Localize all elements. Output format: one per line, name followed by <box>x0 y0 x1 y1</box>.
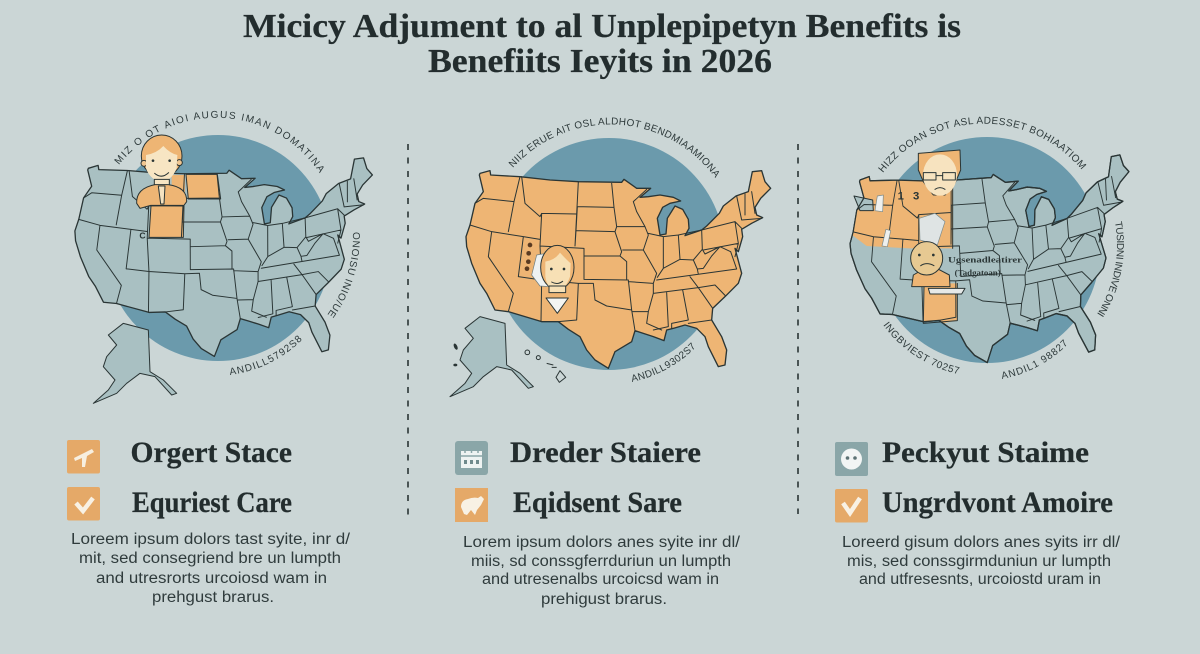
body text: Loreerd gisum dolors anes syits irr dl/ <box>842 534 1121 551</box>
Alaska <box>450 317 533 397</box>
map label: Ugsenadleatirer <box>948 254 1022 264</box>
curved labels: ANDILL5792S8 <box>230 336 302 375</box>
heading: Ungrdvont Amoire <box>882 487 1113 519</box>
body text <box>842 534 1121 588</box>
icon: calendar <box>455 441 488 475</box>
person <box>532 245 574 313</box>
highlighted states <box>852 178 957 323</box>
map of the United States <box>75 135 373 403</box>
body text: and utresenalbs urcoicsd wam in <box>482 571 719 588</box>
body text: Loreem ipsum dolors tast syite, inr d/ <box>71 531 351 548</box>
map circle <box>105 135 331 361</box>
person with white cap <box>911 213 965 294</box>
Alaska <box>93 323 177 403</box>
curved labels: MIZ O OT AIOI AUGUS IMAN DOMATINA <box>114 110 324 174</box>
heading: Equriest Care <box>132 487 292 519</box>
curved labels <box>508 118 719 382</box>
panel: centre map <box>450 118 772 398</box>
curved labels: NIIZ ERUE AIT OSL ALDHOT BENDMIAAMIONA <box>508 118 719 178</box>
body text: mit, sed consegriend bre un lumpth <box>79 550 341 567</box>
column three text <box>835 437 1121 588</box>
map label <box>948 254 1022 278</box>
body text: prehigust brarus. <box>541 591 667 608</box>
body text <box>463 534 741 608</box>
icon: check <box>67 487 100 520</box>
map circle <box>874 137 1100 363</box>
body text: prehgust brarus. <box>152 589 274 606</box>
white tools <box>875 195 891 247</box>
panel: left map <box>74 110 373 404</box>
map circle <box>493 138 725 370</box>
highlighted states <box>149 174 221 237</box>
curved labels <box>114 110 360 375</box>
body text: and utfresesnts, urcoiostd uram in <box>859 571 1101 588</box>
icon: check <box>835 489 868 522</box>
curved labels: INGBVIEST 70257 <box>884 322 960 374</box>
person <box>137 135 187 208</box>
heading: Peckyut Staime <box>882 437 1089 469</box>
map of the United States <box>843 150 1137 374</box>
person with glasses <box>918 150 961 196</box>
heading: Orgert Stace <box>130 437 292 469</box>
icon: elephant <box>455 488 488 522</box>
map label: (Tadgatoan) <box>955 268 1001 278</box>
body text <box>71 531 351 606</box>
curved labels: ANDIL1 98827 <box>1002 339 1066 379</box>
icon: figure <box>67 440 100 474</box>
body text: mis, sed conssgirmduniun ur lumpth <box>847 553 1111 570</box>
title: Benefiits Ieyits in 2026 <box>428 43 772 80</box>
map of the United States <box>450 171 771 397</box>
curved labels: HIZZ OOAN SOT ASL ADESSET BOHIAATIOM <box>878 116 1086 172</box>
curved labels <box>878 116 1124 379</box>
map of the United States: C <box>139 230 146 240</box>
map of the United States: 1 3 <box>898 190 919 202</box>
column one text <box>67 437 351 606</box>
title <box>243 8 961 80</box>
heading: Dreder Staiere <box>510 437 701 469</box>
dots <box>525 243 532 271</box>
curved labels: ANDILL9302S7 <box>632 342 694 382</box>
body text: miis, sd conssgferrduriun un lumpth <box>471 553 731 570</box>
heading: Eqidsent Sare <box>513 487 682 519</box>
curved labels: ONOISU INIO/UE <box>328 232 360 318</box>
body text: Lorem ipsum dolors anes syite inr dl/ <box>463 534 741 551</box>
Hawaii <box>525 350 566 382</box>
curved labels: TUSIDNI INDIVE ONNI <box>1098 221 1124 317</box>
body text: and utresrorts urcoiosd wam in <box>96 570 327 587</box>
title: Micicy Adjument to al Unplepipetyn Benefits is <box>243 8 961 45</box>
column two text <box>455 437 741 608</box>
panel: right map <box>849 116 1130 379</box>
icon: speech dot <box>835 442 868 476</box>
